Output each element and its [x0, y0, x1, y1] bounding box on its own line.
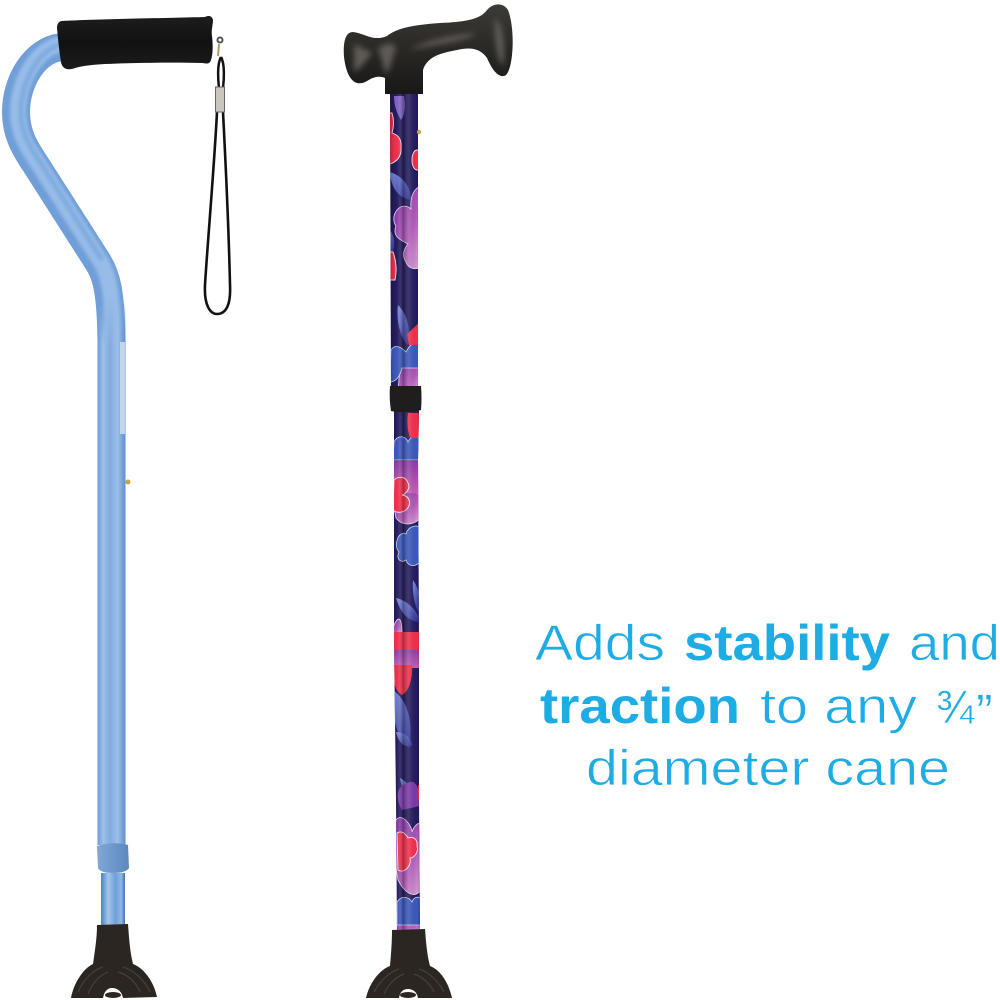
caption text: to any — [760, 678, 917, 734]
rubber quad tip — [366, 929, 452, 998]
panel: offset cane — [16, 16, 230, 998]
caption text: diameter cane — [586, 740, 950, 796]
shaft shading — [390, 94, 420, 930]
caption text: and — [909, 615, 1000, 671]
caption text: stability — [684, 615, 890, 671]
T handle — [344, 4, 513, 94]
floral shaft — [390, 94, 420, 930]
height lock collar — [390, 386, 422, 412]
magenta bands — [394, 461, 419, 668]
caption text — [535, 615, 1000, 796]
rubber quad tip — [71, 924, 157, 998]
height collar — [97, 843, 129, 873]
caption text: ¾ — [936, 681, 975, 733]
brass adjustment button — [126, 480, 130, 484]
panel: floral cane — [344, 4, 513, 998]
wrist strap — [205, 38, 230, 314]
foam grip — [57, 16, 213, 69]
label sticker — [120, 342, 125, 434]
brass adjustment button — [417, 130, 421, 134]
cane tube — [16, 44, 126, 845]
caption text: traction — [540, 678, 740, 734]
lower tube — [101, 873, 125, 926]
caption text: ” — [976, 684, 993, 740]
red flowers — [390, 112, 419, 872]
blue flowers — [390, 343, 421, 925]
caption text: Adds — [535, 615, 665, 671]
leaves — [390, 96, 419, 786]
purple flowers — [392, 186, 421, 934]
